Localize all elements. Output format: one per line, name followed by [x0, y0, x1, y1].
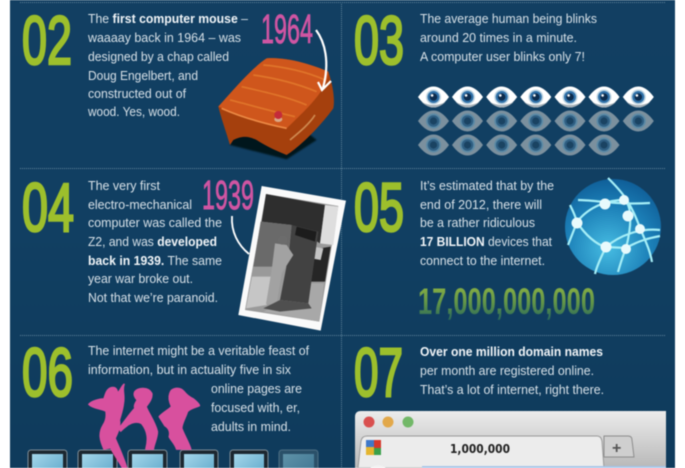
image: wooden mouse [218, 58, 334, 159]
number 06: 06 [22, 334, 73, 411]
number 02: 02 [22, 2, 72, 79]
panel: fact 02 [22, 2, 334, 159]
year 1939: 1939 [202, 172, 254, 218]
text: Z2 computer: year war broke out. [88, 271, 193, 286]
text: Z2 computer: The very first [88, 178, 160, 193]
text: 17 billion devices: It’s estimated that by the [420, 178, 554, 193]
browser window [355, 411, 666, 468]
text: first computer mouse: Doug Engelbert, and [88, 68, 198, 83]
text: domain names [420, 344, 604, 397]
tab title 1,000,000: 1,000,000 [450, 442, 510, 456]
year 1964: 1964 [261, 6, 313, 52]
panel: fact 04 [22, 169, 346, 331]
image: photo of Z2 computer [238, 186, 346, 331]
panel: fact 06 [22, 334, 318, 468]
text: 17 billion devices [420, 178, 554, 268]
text: first computer mouse: constructed out of [88, 86, 186, 101]
text: first computer mouse: waaaay back in 1964 – was [87, 30, 241, 45]
text: blink rate: The average human being blinks [420, 11, 597, 26]
icon: dancer silhouettes [89, 384, 199, 468]
new tab button [604, 436, 634, 457]
text: first computer mouse: wood. Yes, wood. [87, 104, 180, 119]
number 05: 05 [354, 169, 404, 246]
text: adult pages: online pages are [211, 381, 302, 396]
text: 17 billion devices: end of 2012, there will [420, 197, 542, 212]
text: blink rate: A computer user blinks only 7! [420, 49, 585, 64]
panel: fact 07 [354, 334, 666, 468]
icon: tab favicon [366, 440, 381, 455]
text: Z2 computer: back in 1939. The same [88, 253, 222, 268]
number 07: 07 [354, 334, 403, 411]
text: adult pages: adults in mind. [211, 419, 291, 434]
text: adult pages [88, 343, 309, 434]
number 04: 04 [22, 169, 74, 246]
panel: fact 05 [354, 169, 661, 322]
big number 17,000,000,000: 17,000,000,000 [418, 281, 595, 322]
icon: network globe [565, 178, 661, 275]
text: first computer mouse: designed by a chap called [88, 49, 229, 64]
text: domain names: per month are registered online. [420, 363, 594, 378]
icons: thirteen dim eyes [418, 110, 654, 156]
text: Z2 computer: electro-mechanical [88, 197, 192, 212]
text: 17 billion devices: 17 BILLION devices that [420, 234, 552, 249]
number 03: 03 [354, 2, 404, 79]
text: Z2 computer: Z2, and was developed [88, 234, 217, 249]
text: Z2 computer: Not that we’re paranoid. [88, 290, 218, 305]
text: adult pages: information, but in actuality five in six [88, 362, 291, 377]
text: Z2 computer [88, 178, 222, 305]
arrow: 1939 to photo [232, 216, 249, 254]
arrow: 1964 to mouse [316, 30, 331, 90]
text: adult pages: focused with, er, [211, 400, 300, 415]
text: domain names: Over one million domain names [420, 344, 603, 359]
text: 17 billion devices: connect to the internet. [420, 253, 545, 268]
active tab [358, 436, 604, 468]
text: first computer mouse: The first computer mouse – [88, 11, 249, 26]
icons: seven bright eyes [418, 86, 654, 108]
address bar [367, 465, 666, 468]
text: 17 billion devices: be a rather ridiculous [420, 215, 535, 230]
icons: six tablets, one dimmed [28, 450, 318, 468]
new tab button: + [612, 440, 621, 457]
window buttons [364, 416, 414, 428]
text: blink rate: around 20 times in a minute. [420, 30, 577, 45]
panel: fact 03 [354, 2, 654, 156]
text: adult pages: The internet might be a veritable feast of [88, 343, 309, 358]
text: domain names: That’s a lot of internet, right there. [420, 382, 604, 397]
text: blink rate [420, 11, 597, 64]
text: Z2 computer: computer was called the [88, 215, 222, 230]
text: first computer mouse [87, 11, 249, 119]
